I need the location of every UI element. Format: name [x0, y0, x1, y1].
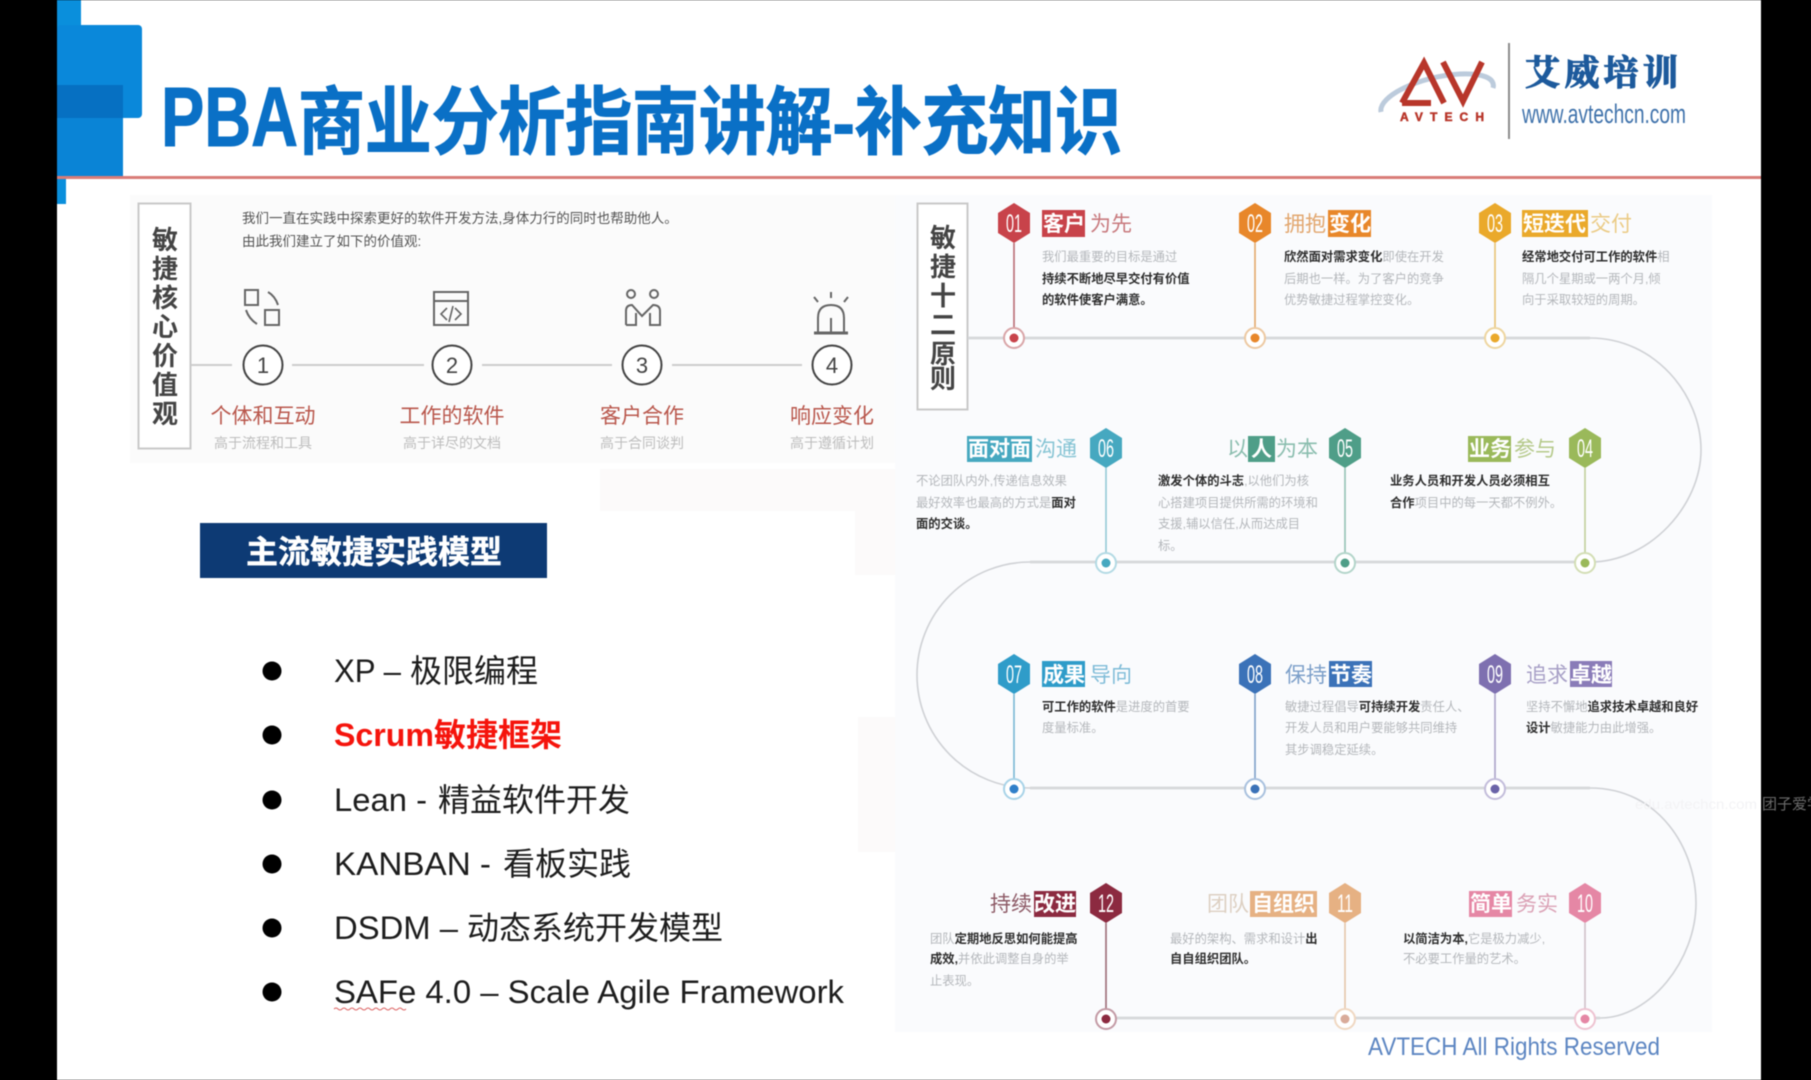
logo: AVTECH wordmark: AVTECH: [1400, 110, 1484, 124]
principle 03: 经常地交付可工作的软件相: [1522, 249, 1670, 264]
list item: DSDM: [262, 910, 723, 946]
principle 10: 10: [1577, 890, 1593, 918]
principle 06: 面对面: [968, 438, 1031, 461]
principle 04: 业务: [1469, 438, 1511, 461]
list item: Scrum: [262, 717, 562, 753]
principle 05: 为本: [1276, 438, 1318, 461]
logo: AV mark: [1381, 62, 1493, 112]
core values heading box: [138, 204, 190, 448]
principles heading box: 敏捷十二原则: [930, 223, 956, 394]
principle 10: 不必要工作量的艺术。: [1403, 951, 1526, 966]
principle 01: [998, 203, 1190, 348]
principle 10: 务实: [1516, 893, 1558, 916]
principle 09: 09: [1487, 661, 1503, 689]
principle 03: 隔几个星期或一两个月,倾: [1522, 272, 1661, 286]
list item: DSDM: 动态系统开发模型: [467, 910, 723, 946]
principle 01: 客户: [1043, 212, 1085, 236]
serpentine timeline path: [917, 338, 1701, 1018]
principle 04: 合作项目中的每一天都不例外。: [1390, 495, 1562, 510]
principle 09: [1479, 654, 1698, 799]
list item: KANBAN: KANBAN -: [334, 846, 491, 882]
principle 02: 后期也一样。为了客户的竞争: [1284, 271, 1444, 286]
icon: alarm: [814, 292, 848, 333]
icon: exchange: [245, 290, 279, 325]
principle 10: 简单: [1470, 893, 1512, 916]
value 4: 4: [826, 353, 838, 378]
principle 04: 业务人员和开发人员必须相互: [1390, 473, 1550, 488]
principle 02: 拥抱: [1284, 213, 1326, 236]
footer copyright: AVTECH All Rights Reserved: [1368, 1033, 1660, 1061]
principle 07: 成果: [1043, 663, 1085, 687]
panel background: twelve principles: [895, 195, 1712, 1032]
principle 02: 欣然面对需求变化即使在开发: [1284, 249, 1444, 264]
principle 01: 为先: [1090, 213, 1132, 236]
core values heading box: 敏捷核心价值观: [152, 225, 178, 429]
title: 商业分析指南讲解-补充知识: [298, 81, 1122, 164]
value 2: [400, 292, 504, 451]
principle 12: 止表现。: [930, 974, 979, 988]
core values intro text: 我们一直在实践中探索更好的软件开发方法,身体力行的同时也帮助他人。: [242, 211, 678, 226]
list item: KANBAN: [262, 846, 631, 882]
principle 10: 以简洁为本,它是极力减少,: [1403, 931, 1545, 946]
value 3: 3: [636, 353, 648, 378]
principle 07: 导向: [1090, 664, 1132, 687]
principle 03: 短迭代: [1523, 213, 1586, 236]
logo: [1381, 43, 1686, 139]
principle 01: 01: [1006, 210, 1022, 238]
principle 09: 设计敏捷能力由此增强。: [1526, 720, 1661, 735]
principle 08: 其步调稳定延续。: [1285, 742, 1383, 757]
principle 06: 06: [1098, 435, 1114, 463]
principle 11: [1170, 883, 1361, 1029]
principle 05: 心搭建项目提供所需的环境和: [1158, 495, 1318, 510]
list item: Scrum: 敏捷框架: [434, 717, 562, 753]
principle 06: [916, 428, 1122, 573]
title: PBA: [161, 70, 298, 164]
list item: Lean: [262, 782, 630, 818]
principle 05: 支援,辅以信任,从而达成目: [1158, 517, 1300, 531]
principle 06: 面的交谈。: [916, 516, 978, 531]
principle 05: 激发个体的斗志,以他们为核: [1158, 473, 1309, 488]
principle 05: 05: [1337, 435, 1353, 463]
value 3: 客户合作: [600, 405, 684, 428]
principle 07: 可工作的软件是进度的首要: [1042, 699, 1190, 714]
principle 08: 开发人员和用户要能够共同维持: [1285, 720, 1457, 735]
principle 08: 节奏: [1330, 664, 1372, 687]
ghost artefacts beside the list: [600, 469, 895, 852]
section banner: agile models: 主流敏捷实践模型: [246, 534, 502, 570]
principle 08: 敏捷过程倡导可持续开发责任人、: [1285, 699, 1470, 714]
value 3: [600, 290, 684, 451]
icon: two people: [626, 290, 660, 325]
panel background: core values: [130, 195, 895, 463]
principle 03: 交付: [1590, 213, 1632, 236]
principle 02: 02: [1247, 210, 1263, 238]
value 3: 高于合同谈判: [600, 435, 684, 451]
panel: twelve principles: [916, 203, 1701, 1029]
value 4: [790, 292, 874, 451]
principle 07: 度量标准。: [1042, 720, 1104, 735]
principle 07: 07: [1006, 661, 1022, 689]
principle 05: 以: [1227, 438, 1248, 461]
list item: Lean: 精益软件开发: [438, 782, 630, 818]
core values intro text: 由此我们建立了如下的价值观:: [242, 234, 421, 249]
principle 01: 我们最重要的目标是通过: [1042, 249, 1177, 264]
principle 05: 人: [1251, 438, 1272, 461]
principle 05: [1158, 428, 1361, 573]
value 1: 个体和互动: [210, 405, 316, 428]
list item: KANBAN: 看板实践: [503, 846, 631, 882]
principle 08: 保持: [1285, 664, 1327, 687]
principle 02: 变化: [1329, 212, 1371, 236]
principle 09: 卓越: [1570, 664, 1612, 687]
principle 09: 追求: [1526, 664, 1568, 687]
principle 12: 持续: [990, 893, 1032, 916]
principle 03: 03: [1487, 210, 1503, 238]
section banner: agile models: [200, 523, 547, 578]
principle 03: [1479, 203, 1670, 348]
list item: XP: 极限编程: [410, 653, 538, 689]
principle 05: 标。: [1158, 539, 1183, 553]
principle 11: 自自组织团队。: [1170, 951, 1256, 966]
principle 06: 沟通: [1035, 438, 1077, 461]
value 1: [210, 290, 316, 451]
list item: Lean: Lean -: [334, 782, 427, 818]
header rule: [57, 176, 1761, 179]
principle 08: 08: [1247, 661, 1263, 689]
icon: code window: [434, 292, 468, 325]
principle 11: 团队: [1207, 893, 1249, 916]
value 1: 高于流程和工具: [214, 435, 312, 451]
principle 12: 成效,并依此调整自身的举: [930, 951, 1069, 966]
value 4: 高于遵循计划: [790, 435, 874, 451]
panel: core values: [138, 204, 874, 451]
value 1: 1: [257, 353, 269, 378]
principles heading box: [918, 204, 968, 410]
principle 12: 12: [1098, 890, 1114, 918]
principle 11: 11: [1337, 890, 1353, 918]
watermark: [1635, 796, 1811, 813]
principle 10: [1403, 883, 1601, 1029]
principle 06: 最好效率也最高的方式是面对: [916, 495, 1076, 510]
principle 01: 的软件使客户满意。: [1042, 292, 1153, 307]
logo: website: www.avtechcn.com: [1521, 99, 1686, 129]
list: agile models: [262, 653, 845, 1010]
value 2: 高于详尽的文档: [403, 435, 501, 451]
principle 02: [1239, 203, 1444, 348]
value 2: 工作的软件: [400, 405, 504, 428]
principle 04: 参与: [1514, 438, 1556, 461]
principle 03: 向于采取较短的周期。: [1522, 292, 1645, 307]
list item: XP: XP –: [334, 653, 401, 689]
list item: SAFe: SAFe 4.0 – Scale Agile Framework: [334, 974, 845, 1010]
watermark: edu.avtechcn.com: [1635, 796, 1757, 812]
principle 12: [930, 883, 1122, 1029]
principle 11: 自组织: [1252, 893, 1315, 916]
principle 11: 最好的架构、需求和设计出: [1170, 931, 1318, 946]
header decoration: blue squares: [57, 0, 142, 204]
principle 02: 优势敏捷过程掌控变化。: [1284, 292, 1419, 307]
list item: XP: [262, 653, 538, 689]
principle 12: 改进: [1034, 893, 1076, 916]
value 2: 2: [446, 353, 458, 378]
value 4: 响应变化: [790, 405, 874, 428]
principle 01: 持续不断地尽早交付有价值: [1042, 271, 1190, 286]
principle 07: [998, 654, 1190, 799]
core values intro text: [242, 211, 678, 249]
principle 09: 坚持不懈地追求技术卓越和良好: [1526, 699, 1698, 714]
principle 04: 04: [1577, 435, 1593, 463]
list item: Scrum: Scrum: [334, 717, 434, 753]
principle 12: 团队定期地反思如何能提高: [930, 931, 1078, 946]
principle 04: [1390, 428, 1601, 573]
principle 08: [1239, 654, 1470, 799]
principle 06: 不论团队内外,传递信息效果: [916, 473, 1067, 488]
logo: company name: 艾威培训: [1525, 46, 1678, 96]
list item: DSDM: DSDM –: [334, 910, 458, 946]
